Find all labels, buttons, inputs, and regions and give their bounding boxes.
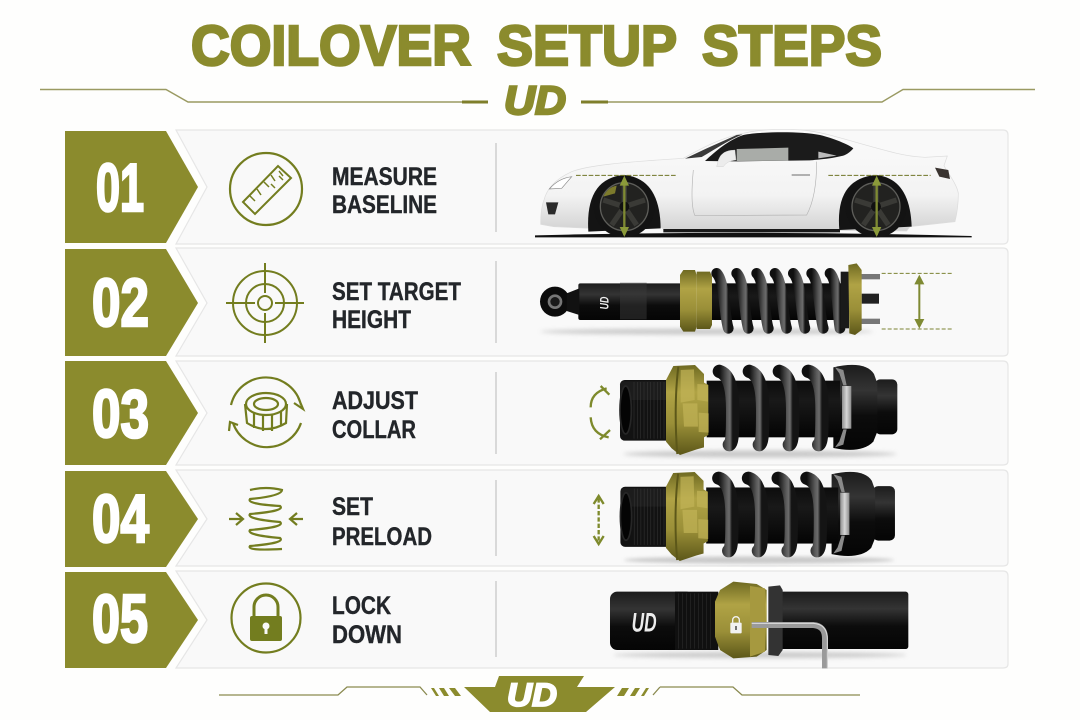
step 5 number badge [65,572,198,668]
step label: measure baseline: BASELINE [332,191,437,219]
step 4 number badge: 04 [92,481,149,557]
illustration: collar adjust coilover [591,365,897,458]
step 2 number badge: 02 [92,265,149,341]
step label: lock down [332,592,402,649]
step 5 number badge: 05 [92,581,148,657]
illustration: locked collar with hex key: UD [632,608,657,638]
step label: set target height: SET TARGET [332,278,461,306]
footer ornament with logo badge [219,676,860,713]
step 3 number badge [65,361,198,465]
title: STEPS [702,14,882,78]
step 2 number badge [65,249,198,356]
step label: adjust collar: ADJUST [332,387,418,415]
icon: small padlock [730,617,742,633]
logo: UD white: UD [507,677,557,713]
illustration: full coilover with height arrow [540,263,952,335]
title: COILOVER [191,14,471,78]
icon: vertical dashed arrow [594,496,604,544]
panel: step 1 background [176,130,1008,244]
icon: rotation arrows [591,386,610,439]
step label: set preload: SET [332,493,373,521]
step label: set target height [332,278,461,334]
logo: UD: UD [504,79,566,123]
title: SETUP [497,14,677,78]
step 4 number badge [65,471,198,567]
icon: spring with arrows [229,488,303,550]
illustration: locked collar with hex key [610,582,908,668]
step 1 number badge [65,131,198,243]
icon: ruler in circle [230,153,302,225]
panel: step 5 background [176,571,1008,668]
title [191,14,882,78]
step 3 number badge: 03 [92,376,149,452]
illustration: full coilover with height arrow: UD [597,296,611,309]
step label: set preload: PRELOAD [332,523,432,551]
step label: set preload [332,493,432,551]
illustration: car with ride height arrows [535,129,972,237]
icon: rotating collar [229,377,303,447]
step label: lock down: DOWN [332,621,402,649]
icon: padlock in circle [232,584,300,652]
icon: target [226,263,304,343]
panel: step 3 background [176,361,1008,465]
illustration: preload coilover [594,472,895,564]
step label: measure baseline [332,163,437,219]
step label: set target height: HEIGHT [332,306,411,334]
panel: step 2 background [176,248,1008,356]
step label: measure baseline: MEASURE [332,163,437,191]
panel: step 4 background [176,470,1008,566]
step label: adjust collar: COLLAR [332,416,416,444]
step 1 number badge: 01 [96,150,144,226]
header divider with logo [40,79,1035,123]
step label: adjust collar [332,387,418,444]
step label: lock down: LOCK [332,592,391,620]
